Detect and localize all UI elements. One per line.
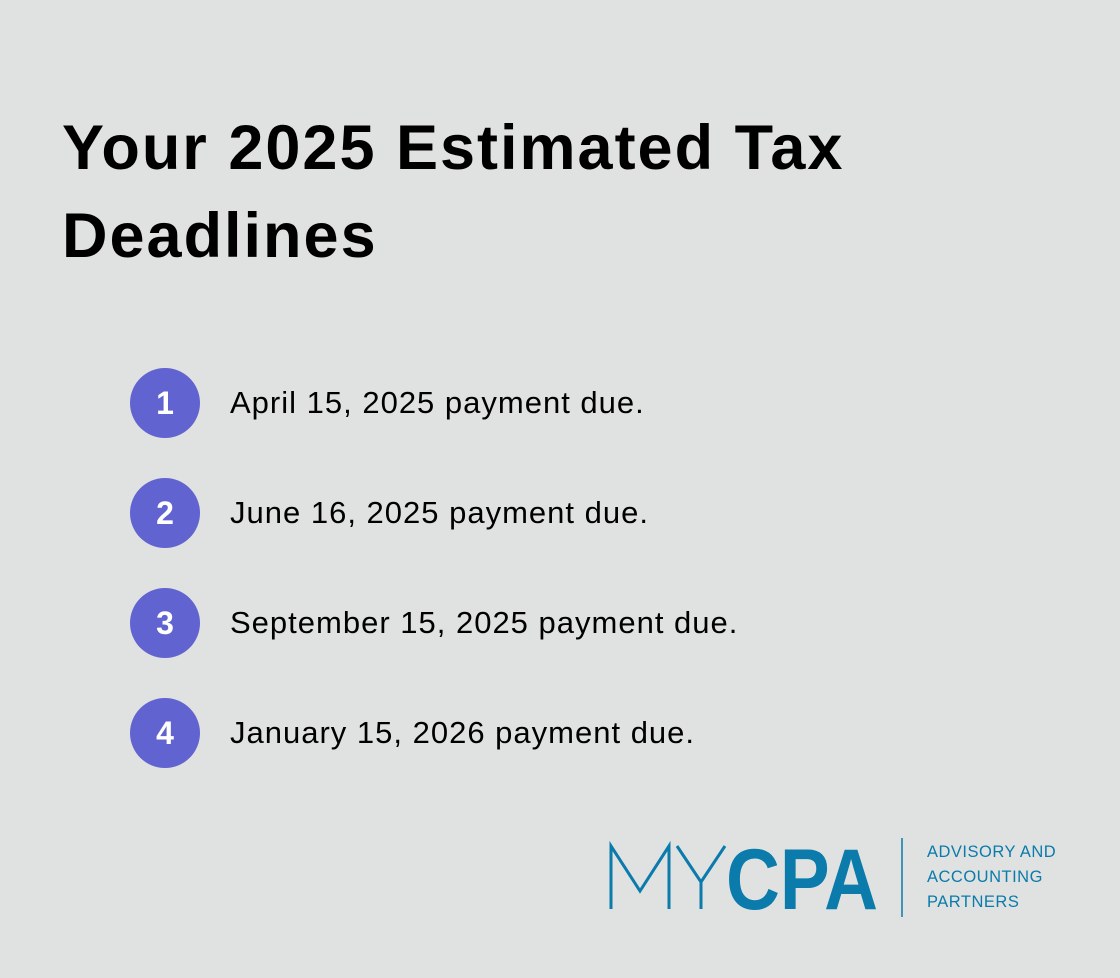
item 2 [130,478,649,548]
item 4: January 15, 2026 payment due. [230,715,695,750]
item 1 [130,368,645,438]
tagline: ACCOUNTING [927,868,1043,886]
CPA bold: CPA [726,832,878,928]
title: Deadlines [62,201,378,271]
item 3: 3 [156,605,174,641]
logo [610,832,1056,928]
item 3 [130,588,738,658]
tagline: ADVISORY AND [927,843,1056,861]
item 1: 1 [156,385,174,421]
title: Your 2025 Estimated Tax [62,113,844,183]
MY thin letters [611,846,725,909]
item 2: 2 [156,495,174,531]
item 1: April 15, 2025 payment due. [230,385,645,420]
item 3: September 15, 2025 payment due. [230,605,738,640]
item 4 [130,698,695,768]
title [62,113,844,271]
tagline: PARTNERS [927,893,1019,911]
item 2: June 16, 2025 payment due. [230,495,649,530]
item 4: 4 [156,715,174,751]
tagline [927,843,1056,911]
